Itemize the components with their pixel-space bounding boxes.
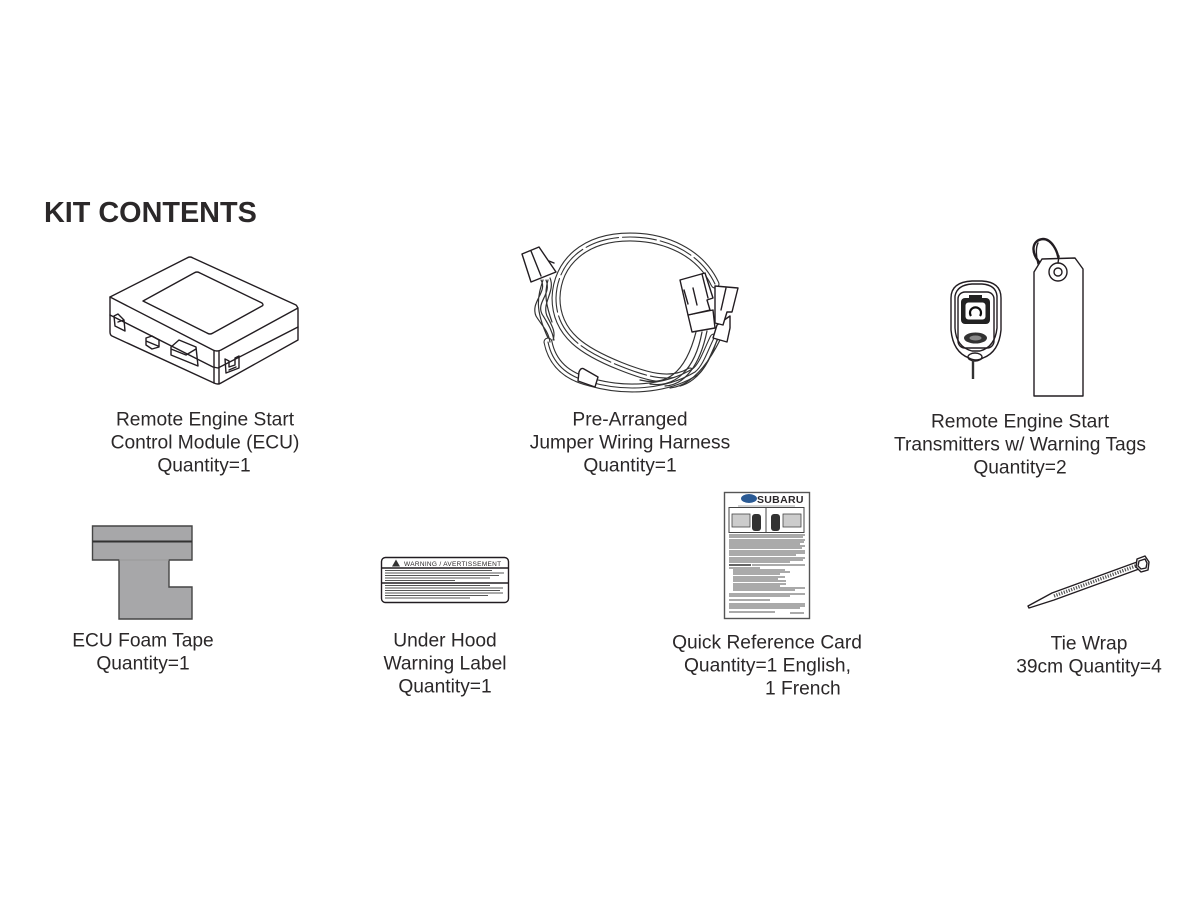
caption: wiring harness: Pre-Arranged <box>572 410 688 430</box>
title: KIT CONTENTS <box>44 197 257 229</box>
icon: warning tag <box>1034 239 1083 396</box>
icon: wiring harness <box>522 237 738 388</box>
caption: quick reference card: Quantity=1 English, <box>684 656 851 676</box>
caption: transmitters: Quantity=2 <box>973 458 1067 478</box>
icon: warning label <box>382 558 508 602</box>
caption: quick reference card: 1 French <box>765 678 841 700</box>
icon: transmitter fob <box>951 281 1001 379</box>
caption: tie wrap <box>1016 634 1162 678</box>
caption: warning label: Warning Label <box>383 654 507 674</box>
caption: foam tape: Quantity=1 <box>96 654 190 674</box>
icon: quick reference card <box>724 492 810 618</box>
caption: wiring harness: Jumper Wiring Harness <box>530 432 730 454</box>
caption: quick reference card <box>672 632 862 700</box>
caption: control module: Remote Engine Start <box>116 410 295 430</box>
icon: tie wrap <box>1028 556 1149 608</box>
caption: control module: Control Module (ECU) <box>111 432 299 454</box>
caption: tie wrap: 39cm Quantity=4 <box>1016 656 1162 678</box>
right connectors <box>688 310 715 332</box>
left connector <box>522 247 556 282</box>
icon: foam tape <box>92 526 192 619</box>
caption: foam tape: ECU Foam Tape <box>72 630 214 652</box>
caption: wiring harness: Quantity=1 <box>583 456 677 476</box>
caption: transmitters: Transmitters w/ Warning Tags <box>894 434 1146 456</box>
caption: wiring harness <box>530 410 730 476</box>
icon: control module <box>110 257 298 384</box>
caption: tie wrap: Tie Wrap <box>1051 634 1127 654</box>
caption: quick reference card: Quick Reference Card <box>672 632 862 654</box>
icon: warning label: WARNING / AVERTISSEMENT <box>404 561 501 568</box>
caption: warning label <box>383 630 507 698</box>
caption: warning label: Quantity=1 <box>398 676 492 698</box>
caption: transmitters <box>894 412 1146 478</box>
wire loop <box>535 237 720 388</box>
caption: control module <box>111 410 299 476</box>
caption: control module: Quantity=1 <box>157 456 251 476</box>
icon: quick reference card: SUBARU <box>757 494 804 506</box>
caption: transmitters: Remote Engine Start <box>931 412 1110 432</box>
sleeve <box>578 368 598 387</box>
caption: warning label: Under Hood <box>393 630 497 652</box>
caption: foam tape <box>72 630 214 674</box>
